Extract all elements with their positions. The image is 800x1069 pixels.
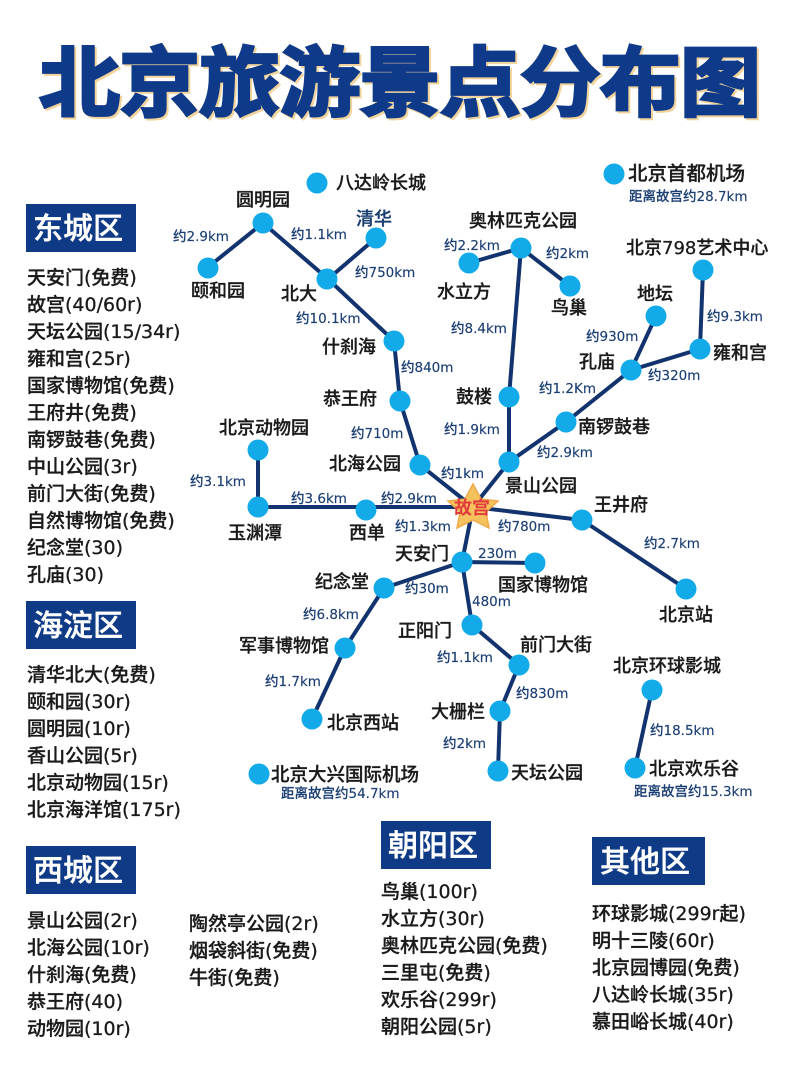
station: 北京首都机场 xyxy=(604,162,748,205)
station: 恭王府: 恭王府 xyxy=(323,388,377,410)
panel: 朝阳区 xyxy=(381,821,548,1038)
distance labels: 约830m xyxy=(516,686,568,702)
distance labels: 约2.9km xyxy=(381,491,437,507)
panel: 西城区 xyxy=(26,846,319,1040)
panel: 西城区: 陶然亭公园(2r) xyxy=(189,912,319,935)
panel: 西城区: 动物园(10r) xyxy=(27,1018,131,1040)
station: 北京首都机场: 距离故宫约28.7km xyxy=(629,188,748,205)
station: 国家博物馆: 国家博物馆 xyxy=(498,575,588,596)
panel: 西城区: 烟袋斜街(免费) xyxy=(189,940,318,962)
distance labels: 约1.2Km xyxy=(539,381,596,397)
panel: 东城区: 南锣鼓巷(免费) xyxy=(27,429,156,451)
distance labels: 约1.1km xyxy=(291,227,347,243)
station: 雍和宫: 雍和宫 xyxy=(713,343,767,364)
distance labels: 约750km xyxy=(355,265,415,281)
station: 鸟巢: 鸟巢 xyxy=(551,298,587,319)
distance labels: 230m xyxy=(478,546,517,562)
station: 北京西站: 北京西站 xyxy=(327,713,399,734)
station: 军事博物馆: 军事博物馆 xyxy=(239,636,329,657)
station: 北京首都机场: 北京首都机场 xyxy=(628,162,745,185)
station: 北京欢乐谷 xyxy=(624,758,753,800)
station: 南锣鼓巷: 南锣鼓巷 xyxy=(578,417,650,438)
station: 圆明园 xyxy=(236,190,290,234)
station: 恭王府 xyxy=(323,388,410,412)
station: 鼓楼: 鼓楼 xyxy=(456,387,492,408)
distance labels: 约840m xyxy=(401,360,453,376)
title: 北京旅游景点分布图 xyxy=(39,41,761,126)
distance labels: 约320m xyxy=(648,368,700,384)
distance labels: 480m xyxy=(472,594,511,610)
station: 南锣鼓巷 xyxy=(556,412,650,438)
distance labels: 约2.9km xyxy=(173,229,229,245)
panel: 西城区: 恭王府(40) xyxy=(27,991,123,1013)
station: 奥林匹克公园 xyxy=(469,211,577,258)
station: 孔庙: 孔庙 xyxy=(579,352,615,373)
distance labels: 约930m xyxy=(586,329,638,345)
distance labels: 约10.1km xyxy=(296,311,361,327)
distance labels: 约18.5km xyxy=(650,723,715,739)
panel: 其他区 xyxy=(592,837,746,1033)
panel: 海淀区: 香山公园(5r) xyxy=(27,745,138,767)
panel: 东城区: 孔庙(30) xyxy=(27,564,104,586)
panel: 西城区: 牛街(免费) xyxy=(189,967,280,989)
panel: 东城区: 纪念堂(30) xyxy=(27,536,123,559)
station: 正阳门 xyxy=(398,614,482,642)
distance labels: 约780m xyxy=(498,519,550,535)
distance labels xyxy=(173,227,763,752)
station: 北海公园: 北海公园 xyxy=(329,454,401,475)
distance labels: 约2km xyxy=(443,736,486,752)
panel: 朝阳区: 水立方(30r) xyxy=(381,907,485,930)
panel: 海淀区: 海淀区 xyxy=(33,609,123,644)
panel: 其他区: 慕田峪长城(40r) xyxy=(592,1011,734,1033)
station: 北京站: 北京站 xyxy=(659,605,713,626)
distance labels: 约1km xyxy=(441,466,484,482)
panel: 东城区: 东城区 xyxy=(33,212,123,247)
station: 玉渊潭 xyxy=(228,496,282,544)
station: 颐和园: 颐和园 xyxy=(191,281,245,302)
panel: 西城区: 景山公园(2r) xyxy=(27,910,138,932)
panel: 东城区: 天坛公园(15/34r) xyxy=(27,321,180,343)
station: 王井府: 王井府 xyxy=(594,494,648,516)
station: 鼓楼 xyxy=(456,386,520,408)
station: 奥林匹克公园: 奥林匹克公园 xyxy=(469,211,577,232)
icon: star 故宫: 故宫 xyxy=(454,497,490,519)
panel: 其他区: 北京园博园(免费) xyxy=(592,957,740,979)
panel: 东城区: 前门大街(免费) xyxy=(27,483,156,505)
distance labels: 约2.9km xyxy=(537,445,593,461)
panel: 其他区: 环球影城(299r起) xyxy=(592,903,746,925)
station: 圆明园: 圆明园 xyxy=(236,190,290,211)
title: 北京旅游景点分布图 xyxy=(41,43,763,128)
distance labels: 约1.1km xyxy=(437,650,493,666)
panel: 朝阳区: 欢乐谷(299r) xyxy=(381,989,497,1011)
station: 纪念堂 xyxy=(315,571,394,598)
distance labels: 约30m xyxy=(405,581,449,597)
distance labels: 约710m xyxy=(351,426,403,442)
station: 北京环球影城: 北京环球影城 xyxy=(613,656,721,677)
station: 北京大兴国际机场: 距离故宫约54.7km xyxy=(281,785,400,802)
panel: 海淀区: 清华北大(免费) xyxy=(27,664,156,686)
station: 西单 xyxy=(349,500,385,544)
station: 大栅栏: 大栅栏 xyxy=(431,702,485,723)
station: 颐和园 xyxy=(191,258,245,302)
station: 北京798艺术中心: 北京798艺术中心 xyxy=(626,238,768,259)
distance labels: 约2km xyxy=(546,246,589,262)
station: 大栅栏 xyxy=(431,700,510,723)
station: 前门大街 xyxy=(508,635,592,676)
distance labels: 约6.8km xyxy=(303,607,359,623)
station: 什刹海: 什刹海 xyxy=(322,337,376,358)
station: 鸟巢 xyxy=(551,276,587,319)
panel: 朝阳区: 三里屯(免费) xyxy=(381,962,491,984)
station: 纪念堂: 纪念堂 xyxy=(315,571,369,593)
panel: 东城区: 王府井(免费) xyxy=(27,402,137,424)
station: 国家博物馆 xyxy=(498,552,588,596)
distance labels: 约3.1km xyxy=(190,474,246,490)
distance labels: 约9.3km xyxy=(707,309,763,325)
route lines xyxy=(207,223,703,771)
station: 北京动物园 xyxy=(219,418,309,460)
station: 地坛: 地坛 xyxy=(637,284,673,305)
station: 景山公园: 景山公园 xyxy=(505,476,577,497)
panel: 东城区: 故宫(40/60r) xyxy=(27,294,142,316)
panel: 西城区: 什刹海(免费) xyxy=(27,964,137,986)
distance labels: 约3.6km xyxy=(291,491,347,507)
station: 北京798艺术中心 xyxy=(626,238,768,280)
panel: 海淀区: 北京海洋馆(175r) xyxy=(27,799,181,821)
panel: 海淀区 xyxy=(26,601,181,821)
panel: 其他区: 明十三陵(60r) xyxy=(592,930,715,952)
station: 正阳门: 正阳门 xyxy=(398,621,452,642)
station: 王井府 xyxy=(572,494,648,530)
station: 孔庙 xyxy=(579,352,642,380)
station: 八达岭长城: 八达岭长城 xyxy=(336,173,426,194)
station: 水立方: 水立方 xyxy=(437,282,491,303)
panel: 东城区 xyxy=(26,204,180,586)
panel: 海淀区: 圆明园(10r) xyxy=(27,718,131,740)
station: 什刹海 xyxy=(322,330,404,358)
station: 景山公园 xyxy=(498,452,577,497)
station: 清华 xyxy=(356,209,392,248)
panel: 朝阳区: 鸟巢(100r) xyxy=(381,881,478,903)
station: 地坛 xyxy=(637,284,673,326)
distance labels: 约2.7km xyxy=(644,536,700,552)
panel: 朝阳区: 奥林匹克公园(免费) xyxy=(381,935,548,957)
station: 北海公园 xyxy=(329,454,430,476)
station: 北京西站 xyxy=(302,708,399,734)
station: 北京大兴国际机场: 北京大兴国际机场 xyxy=(271,765,419,786)
station: 前门大街: 前门大街 xyxy=(520,635,592,656)
station: 北京环球影城 xyxy=(613,656,721,700)
station: 雍和宫 xyxy=(690,338,767,364)
panel: 东城区: 雍和宫(25r) xyxy=(27,348,131,370)
distance labels: 约1.7km xyxy=(265,674,321,690)
station: 天坛公园 xyxy=(488,760,583,784)
panel: 其他区: 八达岭长城(35r) xyxy=(592,984,734,1006)
distance labels: 约8.4km xyxy=(451,321,507,337)
panel: 朝阳区: 朝阳区 xyxy=(388,829,478,864)
station: 天安门: 天安门 xyxy=(395,544,449,565)
distance labels: 约1.9km xyxy=(444,422,500,438)
panel: 海淀区: 颐和园(30r) xyxy=(27,691,131,713)
station: 北大: 北大 xyxy=(281,284,317,305)
panel: 东城区: 天安门(免费) xyxy=(27,267,137,289)
distance labels: 约1.3km xyxy=(395,519,451,535)
icon: star 故宫 xyxy=(448,484,498,528)
distance labels: 约2.2km xyxy=(444,238,500,254)
station: 天安门 xyxy=(395,544,472,572)
panel: 其他区: 其他区 xyxy=(600,845,690,880)
station: 北京欢乐谷: 北京欢乐谷 xyxy=(649,759,739,780)
station: 北大 xyxy=(281,268,338,305)
panel: 西城区: 西城区 xyxy=(33,854,123,889)
station: 北京站 xyxy=(659,578,713,626)
panel: 海淀区: 北京动物园(15r) xyxy=(27,772,169,794)
panel: 东城区: 国家博物馆(免费) xyxy=(27,375,175,397)
panel: 东城区: 自然博物馆(免费) xyxy=(27,509,175,532)
station: 玉渊潭: 玉渊潭 xyxy=(228,523,282,544)
station: 西单: 西单 xyxy=(349,523,385,544)
station: 北京大兴国际机场 xyxy=(248,764,419,802)
station: 天坛公园: 天坛公园 xyxy=(511,763,583,784)
station: 水立方 xyxy=(437,252,491,303)
panel: 朝阳区: 朝阳公园(5r) xyxy=(381,1016,492,1038)
panel: 西城区: 北海公园(10r) xyxy=(27,937,150,959)
station: 北京欢乐谷: 距离故宫约15.3km xyxy=(634,783,753,800)
station: 北京动物园: 北京动物园 xyxy=(219,418,309,439)
panel: 东城区: 中山公园(3r) xyxy=(27,456,138,478)
station: 清华: 清华 xyxy=(356,209,392,230)
